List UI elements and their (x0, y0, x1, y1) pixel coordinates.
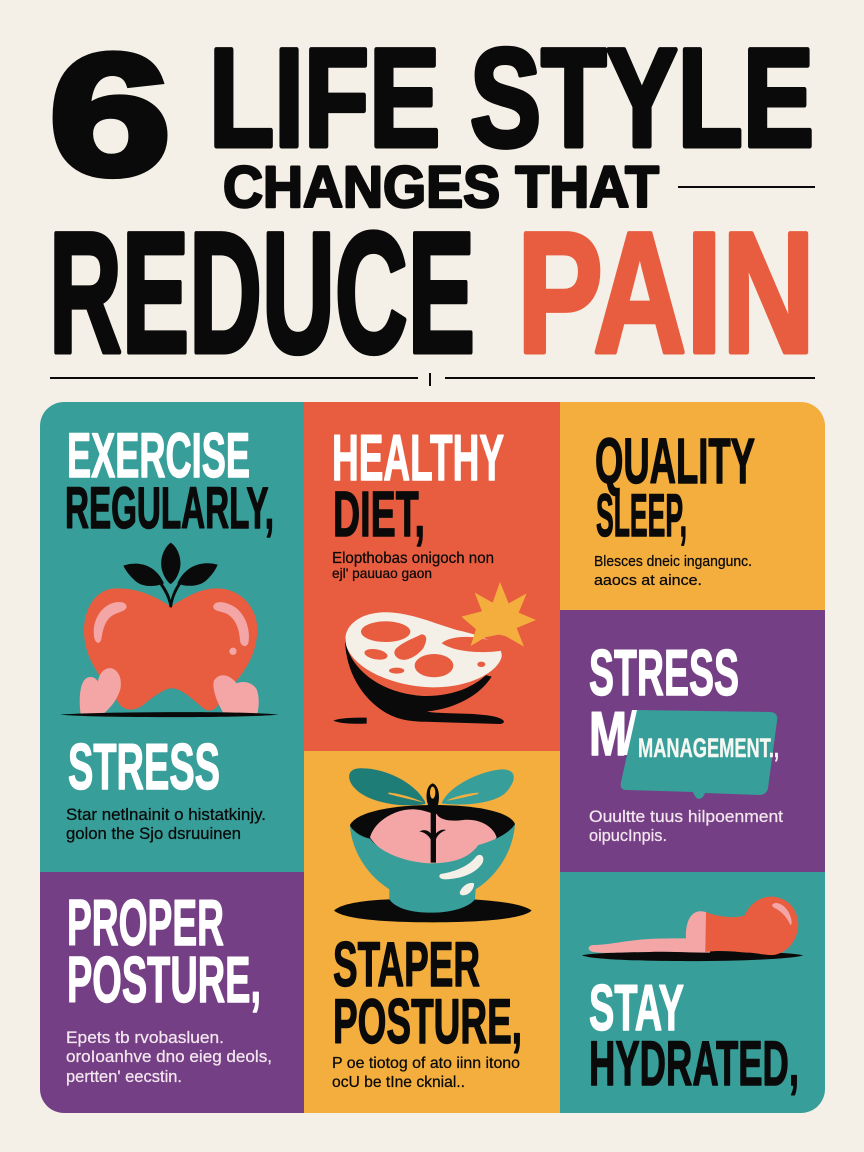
heading: posture: POSTURE, (67, 943, 261, 1016)
body text (594, 554, 751, 586)
body text (589, 807, 783, 845)
heading: posture: POSTURE, (333, 987, 522, 1057)
heading: stress: STRESS (589, 636, 739, 709)
panel: proper posture (40, 872, 304, 1113)
heading: regularly: REGULARLY, (65, 476, 274, 541)
heading: proper: PROPER (67, 886, 224, 959)
panel: quality sleep: SLEEP, (596, 482, 687, 549)
panel: healthy diet (304, 402, 560, 751)
heading: partial m: M (589, 700, 627, 769)
icon: food bowl with star (333, 582, 536, 724)
panel: exercise regularly (40, 402, 304, 872)
body text (332, 550, 494, 581)
speech bubble (621, 710, 779, 799)
panel: staper posture (304, 751, 560, 1113)
body text: golon the Sjo dsruuinen (66, 824, 241, 843)
body text: aaocs at aince. (594, 572, 702, 589)
icon: reclining figure (582, 897, 803, 961)
panel grid (40, 402, 825, 1113)
title: number 6: 6 (49, 19, 171, 211)
bubble label: MANAGEMENT., (638, 733, 779, 763)
heading: stress: STRESS (68, 730, 220, 803)
body text (66, 1028, 272, 1086)
body text: pertten' eecstin. (66, 1067, 182, 1086)
heading: healthy: HEALTHY (332, 421, 504, 494)
body text: ocU be tIne cknial.. (332, 1074, 465, 1091)
body text (332, 1056, 520, 1088)
body text: Star netlnainit o histatkinjy. (66, 805, 266, 824)
title: reduce: REDUCE (49, 197, 475, 389)
title: changes that: CHANGES THAT (223, 155, 659, 220)
body text (66, 805, 266, 843)
heading: exercise: EXERCISE (67, 421, 250, 491)
body text: oipucInpis. (589, 826, 667, 845)
body text: ejl' pauuao gaon (332, 565, 432, 581)
heading: diet: DIET, (333, 478, 425, 550)
heading: stay: STAY (589, 971, 684, 1044)
heading: partial m (592, 710, 637, 756)
body text: Blesces dneic ingangunc. (594, 553, 752, 570)
body text: oroIoanhve dno eieg deols, (66, 1047, 272, 1066)
body text: Ouultte tuus hilpoenment (589, 807, 783, 826)
body text: P oe tiotog of ato iinn itono (332, 1055, 520, 1072)
body text: Epets tb rvobasluen. (66, 1028, 224, 1047)
icon: apple (60, 543, 279, 717)
body text: Elopthobas onigoch non (332, 550, 494, 567)
panel: stay hydrated (560, 872, 825, 1113)
title (49, 19, 815, 389)
panel: quality sleep (560, 402, 825, 610)
heading: staper: STAPER (333, 930, 480, 1000)
icon: bowl with plant (334, 768, 532, 922)
panel: stress management (560, 610, 825, 872)
